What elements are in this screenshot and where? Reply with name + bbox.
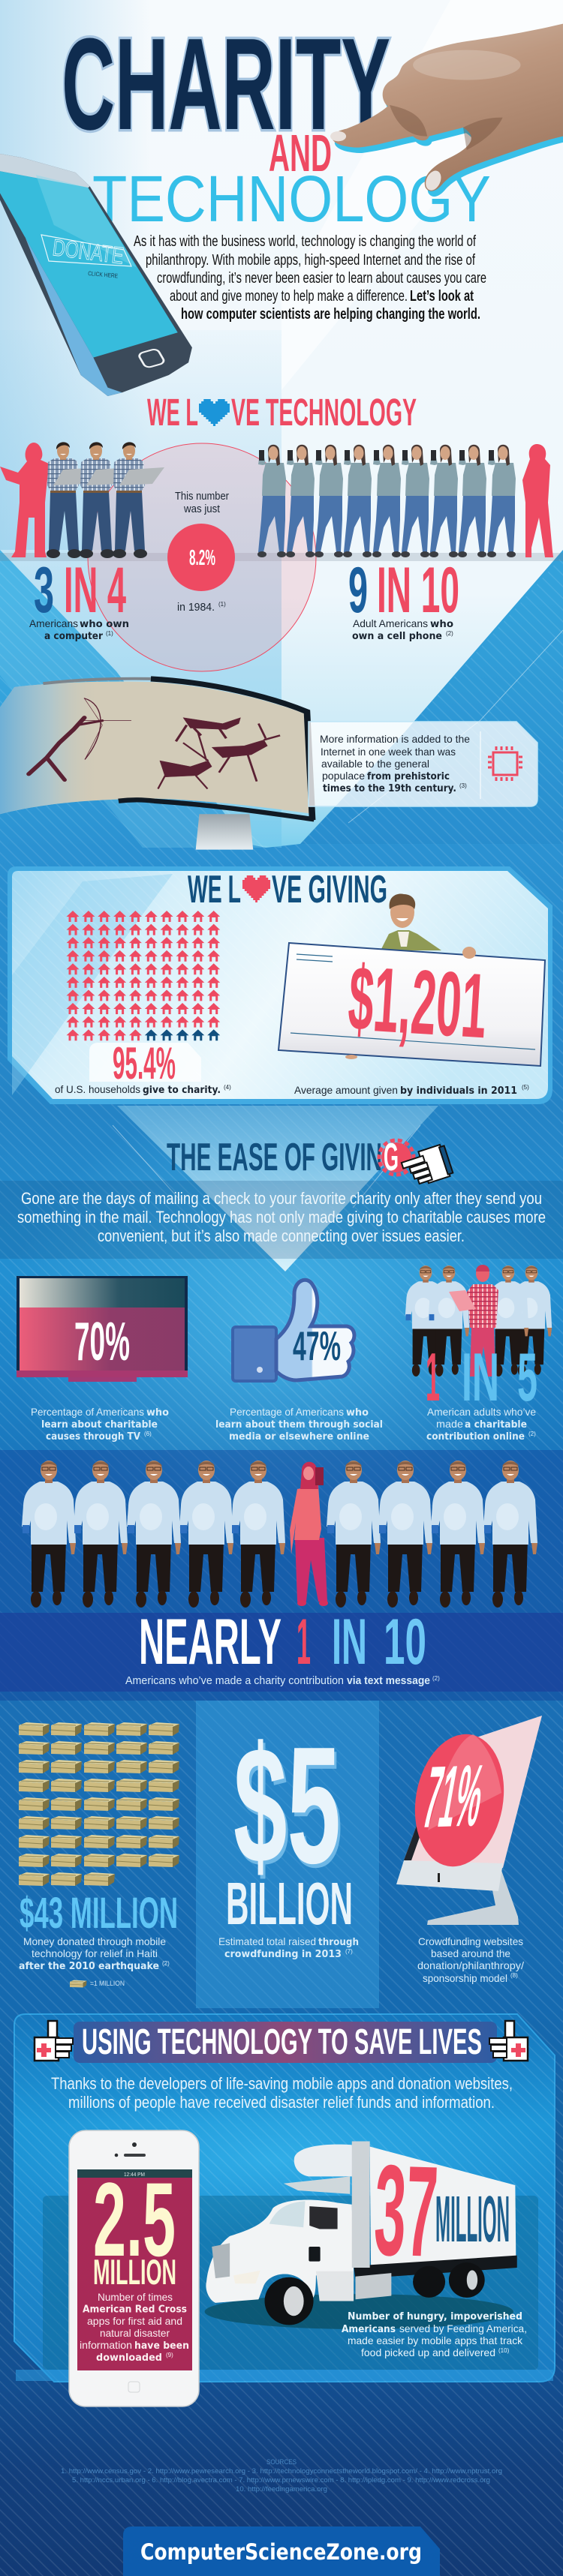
- heading: the ease of giving: [167, 1136, 453, 1189]
- footer: computerscience zone: ComputerScienceZone.org: [140, 2539, 422, 2565]
- icon: microchip: [488, 746, 522, 781]
- icon: blue pixel heart: [199, 399, 230, 426]
- caption: social media: [215, 1406, 383, 1443]
- caption: text message: (2): [432, 1675, 440, 1682]
- panel: $5 billion: $5: [233, 1713, 341, 1899]
- caption: online contribution: made: [436, 1418, 463, 1430]
- stat: 2.5 million: MILLION: [93, 2252, 176, 2292]
- people: 1 in 5 group: [405, 1265, 552, 1416]
- red stat circle: [167, 524, 235, 591]
- caption: crowdfunding websites: based around the: [431, 1947, 510, 1959]
- icon: left pixel hand with cross: [35, 2021, 73, 2061]
- callout: more information: times to the 19th century.: [323, 783, 456, 794]
- caption: feeding america: Americans: [342, 2324, 396, 2335]
- caption: red cross apps: [80, 2291, 189, 2364]
- people: nine women with phones and one silhouette: [257, 444, 553, 557]
- panel: $5 billion: BILLION: [226, 1870, 353, 1937]
- painting: archer: [29, 698, 131, 780]
- stat: 2.5 million: 2.5: [93, 2160, 176, 2278]
- red silhouette woman: [522, 444, 553, 557]
- giant check: [278, 943, 545, 1066]
- caption: average amount: by individuals in 2011: [400, 1085, 517, 1097]
- stat: nearly 1 in 10: 10: [384, 1606, 426, 1678]
- caption: feeding america: served by Feeding America,: [399, 2322, 527, 2334]
- stat: 3 in 4: (1): [106, 630, 113, 637]
- caption: crowdfunding websites: [417, 1935, 524, 1984]
- caption: social media: media or elsewhere online: [229, 1431, 369, 1443]
- caption: tv: causes through TV: [46, 1431, 140, 1443]
- caption: feeding america: [342, 2311, 527, 2358]
- chart: money bundles pictogram: [19, 1722, 179, 1886]
- light inverted triangle: [117, 1106, 438, 1271]
- caption: red cross apps: apps for first aid and: [87, 2315, 182, 2327]
- caption: tv: who: [146, 1407, 169, 1419]
- red man with laptop: [449, 1265, 498, 1377]
- caption: tv: Percentage of Americans: [31, 1406, 144, 1418]
- caption: tv: learn about charitable: [41, 1419, 158, 1431]
- stat: 3 in 4: Americans: [29, 617, 78, 629]
- caption: households: [55, 1083, 231, 1096]
- callout: more information: from prehistoric: [367, 771, 450, 782]
- panel: $5 billion: [196, 1701, 379, 2008]
- caption: haiti: Money donated through mobile: [23, 1935, 166, 1947]
- intro paragraph: Let’s look at: [410, 288, 474, 305]
- stat: 9 in 10: (2): [446, 630, 453, 637]
- chart: imac 71%: [396, 1716, 542, 1925]
- intro paragraph: [134, 233, 486, 323]
- callout: more information: Internet in one week than was: [321, 746, 456, 758]
- stat: nearly 1 in 10: IN: [332, 1606, 367, 1678]
- stat: 3 in 4: 3: [34, 554, 54, 626]
- caption: red cross apps: information: [80, 2339, 132, 2351]
- chart: thumbs up 47%: 47%: [293, 1323, 341, 1369]
- caption: haiti: [19, 1935, 170, 1972]
- caption: crowdfunding total: Estimated total raised: [218, 1935, 316, 1947]
- icon: red gear: [379, 1140, 414, 1175]
- caption: text message: Americans who’ve made a charity contribution: [125, 1674, 344, 1687]
- title word: And: AND: [269, 124, 332, 182]
- caption: feeding america: Number of hungry, impoverished: [348, 2311, 522, 2322]
- callout: more information: [309, 722, 537, 806]
- caption: social media: learn about them through social: [215, 1419, 383, 1431]
- stat: 9 in 10: 9: [348, 554, 368, 626]
- caption: social media: who: [346, 1407, 369, 1419]
- caption: haiti: (2): [162, 1960, 170, 1967]
- panel: using technology to save lives: [11, 2014, 555, 2382]
- caption: households: of U.S. households: [55, 1083, 140, 1095]
- caption: households: give to charity.: [143, 1085, 221, 1096]
- caption: feeding america: (10): [498, 2347, 510, 2354]
- stat: $43 million: $43 MILLION: [20, 1889, 178, 1938]
- paragraph: thanks to the developers: [51, 2074, 513, 2112]
- caption: crowdfunding total: [218, 1935, 359, 1960]
- caption: haiti: after the 2010 earthquake: [19, 1961, 159, 1972]
- truck: 37 million: 37: [372, 2138, 440, 2284]
- sources: 10. http://feedingamerica.org: [236, 2485, 327, 2493]
- sources: 5. http://nccs.urban.org - 6. http://blog.avectra.com - 7. http://www.prnewswire.com - 8. http://ipledg.com - 9. http://www.redcross.org: [72, 2476, 490, 2484]
- red silhouette with laptop: [0, 443, 49, 557]
- intro paragraph: about and give money to help make a difference.: [170, 288, 408, 305]
- caption: red cross apps: Number of times: [98, 2291, 173, 2303]
- stat: 2.5 million: [93, 2160, 176, 2292]
- caption: text message: via text message: [347, 1674, 430, 1687]
- red woman with phone: [290, 1462, 328, 1606]
- stat: 95.4%: 95.4%: [113, 1038, 176, 1088]
- panel: $5 billion: $5: [236, 1716, 343, 1902]
- stat: 9 in 10: who: [430, 619, 453, 630]
- stat: 1 in 5: 5: [517, 1340, 537, 1416]
- caption: social media: Percentage of Americans: [230, 1406, 344, 1418]
- panel: we love giving: [8, 866, 552, 1104]
- caption: tv: [31, 1406, 169, 1443]
- stat: 3 in 4: IN 4: [64, 554, 126, 626]
- title: [62, 11, 491, 236]
- caption: online contribution: a charitable: [465, 1419, 527, 1431]
- sources: [61, 2458, 502, 2493]
- paragraph: gone are the days: [17, 1189, 546, 1245]
- stat: nearly 1 in 10: NEARLY: [139, 1606, 282, 1678]
- caption: online contribution: (2): [528, 1431, 536, 1437]
- caption: feeding america: made easier by mobile apps that track: [348, 2334, 523, 2346]
- heading band: [74, 2022, 497, 2063]
- callout circle: 8.2% in 1984: [88, 443, 316, 671]
- callout circle: 8.2% in 1984: 8.2%: [189, 546, 215, 570]
- callout: more information: available to the general: [321, 758, 429, 770]
- heading: the ease of giving: THE EASE OF GIVIN: [167, 1136, 382, 1179]
- chart: 100 houses pictogram: [66, 911, 220, 1040]
- icon: pixel pointing hand: [400, 1143, 453, 1189]
- stat: 1 in 5: 1: [426, 1340, 440, 1416]
- stat: 9 in 10: [348, 554, 459, 642]
- stat: nearly 1 in 10: 1: [297, 1606, 311, 1678]
- truck: 37 million: [205, 2138, 517, 2329]
- icon: smartphone with donate screen: [0, 154, 192, 396]
- caption: crowdfunding websites: (8): [510, 1972, 518, 1979]
- caption: average amount: Average amount given: [294, 1084, 398, 1096]
- caption: online contribution: [426, 1406, 536, 1443]
- heading: the ease of giving: G: [384, 1136, 399, 1179]
- icon: right pixel hand with cross: [489, 2021, 528, 2061]
- caption: red cross apps: natural disaster: [100, 2327, 170, 2339]
- stat: 1 in 5: [426, 1340, 537, 1416]
- caption: households: (4): [224, 1084, 231, 1091]
- heading: we love giving: WE L: [188, 868, 241, 911]
- caption: haiti: technology for relief in Haiti: [32, 1947, 158, 1959]
- heading: we love technology: WE L: [147, 391, 198, 434]
- sources: SOURCES: [266, 2458, 297, 2466]
- phone label: donate button: [41, 234, 131, 279]
- caption: crowdfunding total: (7): [345, 1948, 353, 1955]
- painting: deer: [158, 718, 280, 789]
- heading: we love giving: [188, 868, 387, 911]
- footer: computerscience zone: [123, 2526, 440, 2576]
- sources: 1. http://www.census.gov - 2. http://www.pewresearch.org - 3. http://technologyconnectstheworld.blogspot.com/ - 4. http://www.nptrust.org: [61, 2467, 502, 2475]
- caption: red cross apps: American Red Cross: [83, 2304, 187, 2315]
- row of ten people: [22, 1461, 537, 1608]
- callout: more information: populace: [322, 770, 365, 782]
- caption: crowdfunding websites: donation/philanthropy/: [417, 1959, 524, 1971]
- callout: more information: More information is added to the: [320, 733, 470, 745]
- people: one silhouette and three men with laptops: [0, 442, 164, 558]
- caption: average amount: (5): [522, 1084, 529, 1091]
- caption: crowdfunding websites: sponsorship model: [423, 1972, 507, 1984]
- caption: tv: (6): [144, 1431, 152, 1437]
- caption: crowdfunding total: through: [318, 1937, 359, 1948]
- teal panel behind truck: [43, 2196, 538, 2370]
- caption: red cross apps: have been: [134, 2340, 189, 2352]
- section: nearly 1 in 10: [0, 1450, 563, 1701]
- phone label: donate button: CLICK HERE: [88, 270, 118, 279]
- caption: average amount: [294, 1084, 529, 1097]
- chart: thumbs up 47%: [233, 1280, 354, 1381]
- stat: 3 in 4: who own: [80, 619, 129, 630]
- phone label: donate button: DONATE: [51, 234, 125, 269]
- heading: we love giving: VE GIVING: [272, 868, 387, 911]
- paragraph: gone are the days: convenient, but it’s also made connecting over issues easier.: [98, 1226, 465, 1245]
- callout: more information: (3): [459, 782, 467, 789]
- floor shadow band: [0, 553, 563, 561]
- stat: 9 in 10: IN 10: [377, 554, 459, 626]
- callout circle: 8.2% in 1984: was just: [183, 503, 220, 515]
- stat: 3 in 4: [29, 554, 129, 642]
- callout circle: 8.2% in 1984: (1): [218, 601, 226, 608]
- chart: tv 70%: 70%: [74, 1312, 130, 1372]
- icon: red pixel heart: [242, 875, 270, 902]
- caption: red cross apps: downloaded: [96, 2352, 162, 2364]
- caption: crowdfunding websites: Crowdfunding websites: [418, 1935, 523, 1947]
- paragraph: thanks to the developers: millions of people have received disaster relief funds and information.: [68, 2093, 495, 2112]
- caption: crowdfunding total: crowdfunding in 2013: [224, 1949, 342, 1960]
- chart: tv 70%: [17, 1276, 188, 1382]
- curved monitor with cave painting: [0, 679, 315, 850]
- iphone: 2.5 million: 12:44 PM: [124, 2172, 145, 2178]
- caption: online contribution: American adults who’ve: [427, 1406, 536, 1418]
- stat: 9 in 10: Adult Americans: [353, 617, 428, 629]
- callout circle: 8.2% in 1984: This number: [175, 491, 229, 503]
- caption: feeding america: food picked up and delivered: [361, 2346, 495, 2358]
- dark band behind paragraph: [0, 1181, 563, 1259]
- iphone: 2.5 million: [69, 2130, 199, 2406]
- legend: bundle equals one million: =1 MILLION: [90, 1980, 125, 1987]
- title word: Technology: TECHNOLOGY: [92, 163, 491, 236]
- stat: 95.4%: [89, 1038, 201, 1088]
- icon: hand pointing: [330, 24, 563, 197]
- heading: we love technology: [147, 391, 417, 434]
- caption: online contribution: contribution online: [426, 1431, 525, 1443]
- stat: 1 in 5: IN: [462, 1340, 499, 1416]
- stat: 9 in 10: own a cell phone: [352, 631, 442, 642]
- monitor stand: [196, 814, 253, 850]
- legend: bundle equals one million: [70, 1980, 125, 1987]
- callout circle: 8.2% in 1984: in 1984.: [177, 602, 215, 614]
- man holding giant check: [278, 894, 545, 1066]
- heading: we love technology: VE TECHNOLOGY: [231, 391, 417, 434]
- caption: red cross apps: (9): [166, 2352, 173, 2358]
- stat: 3 in 4: a computer: [44, 631, 104, 642]
